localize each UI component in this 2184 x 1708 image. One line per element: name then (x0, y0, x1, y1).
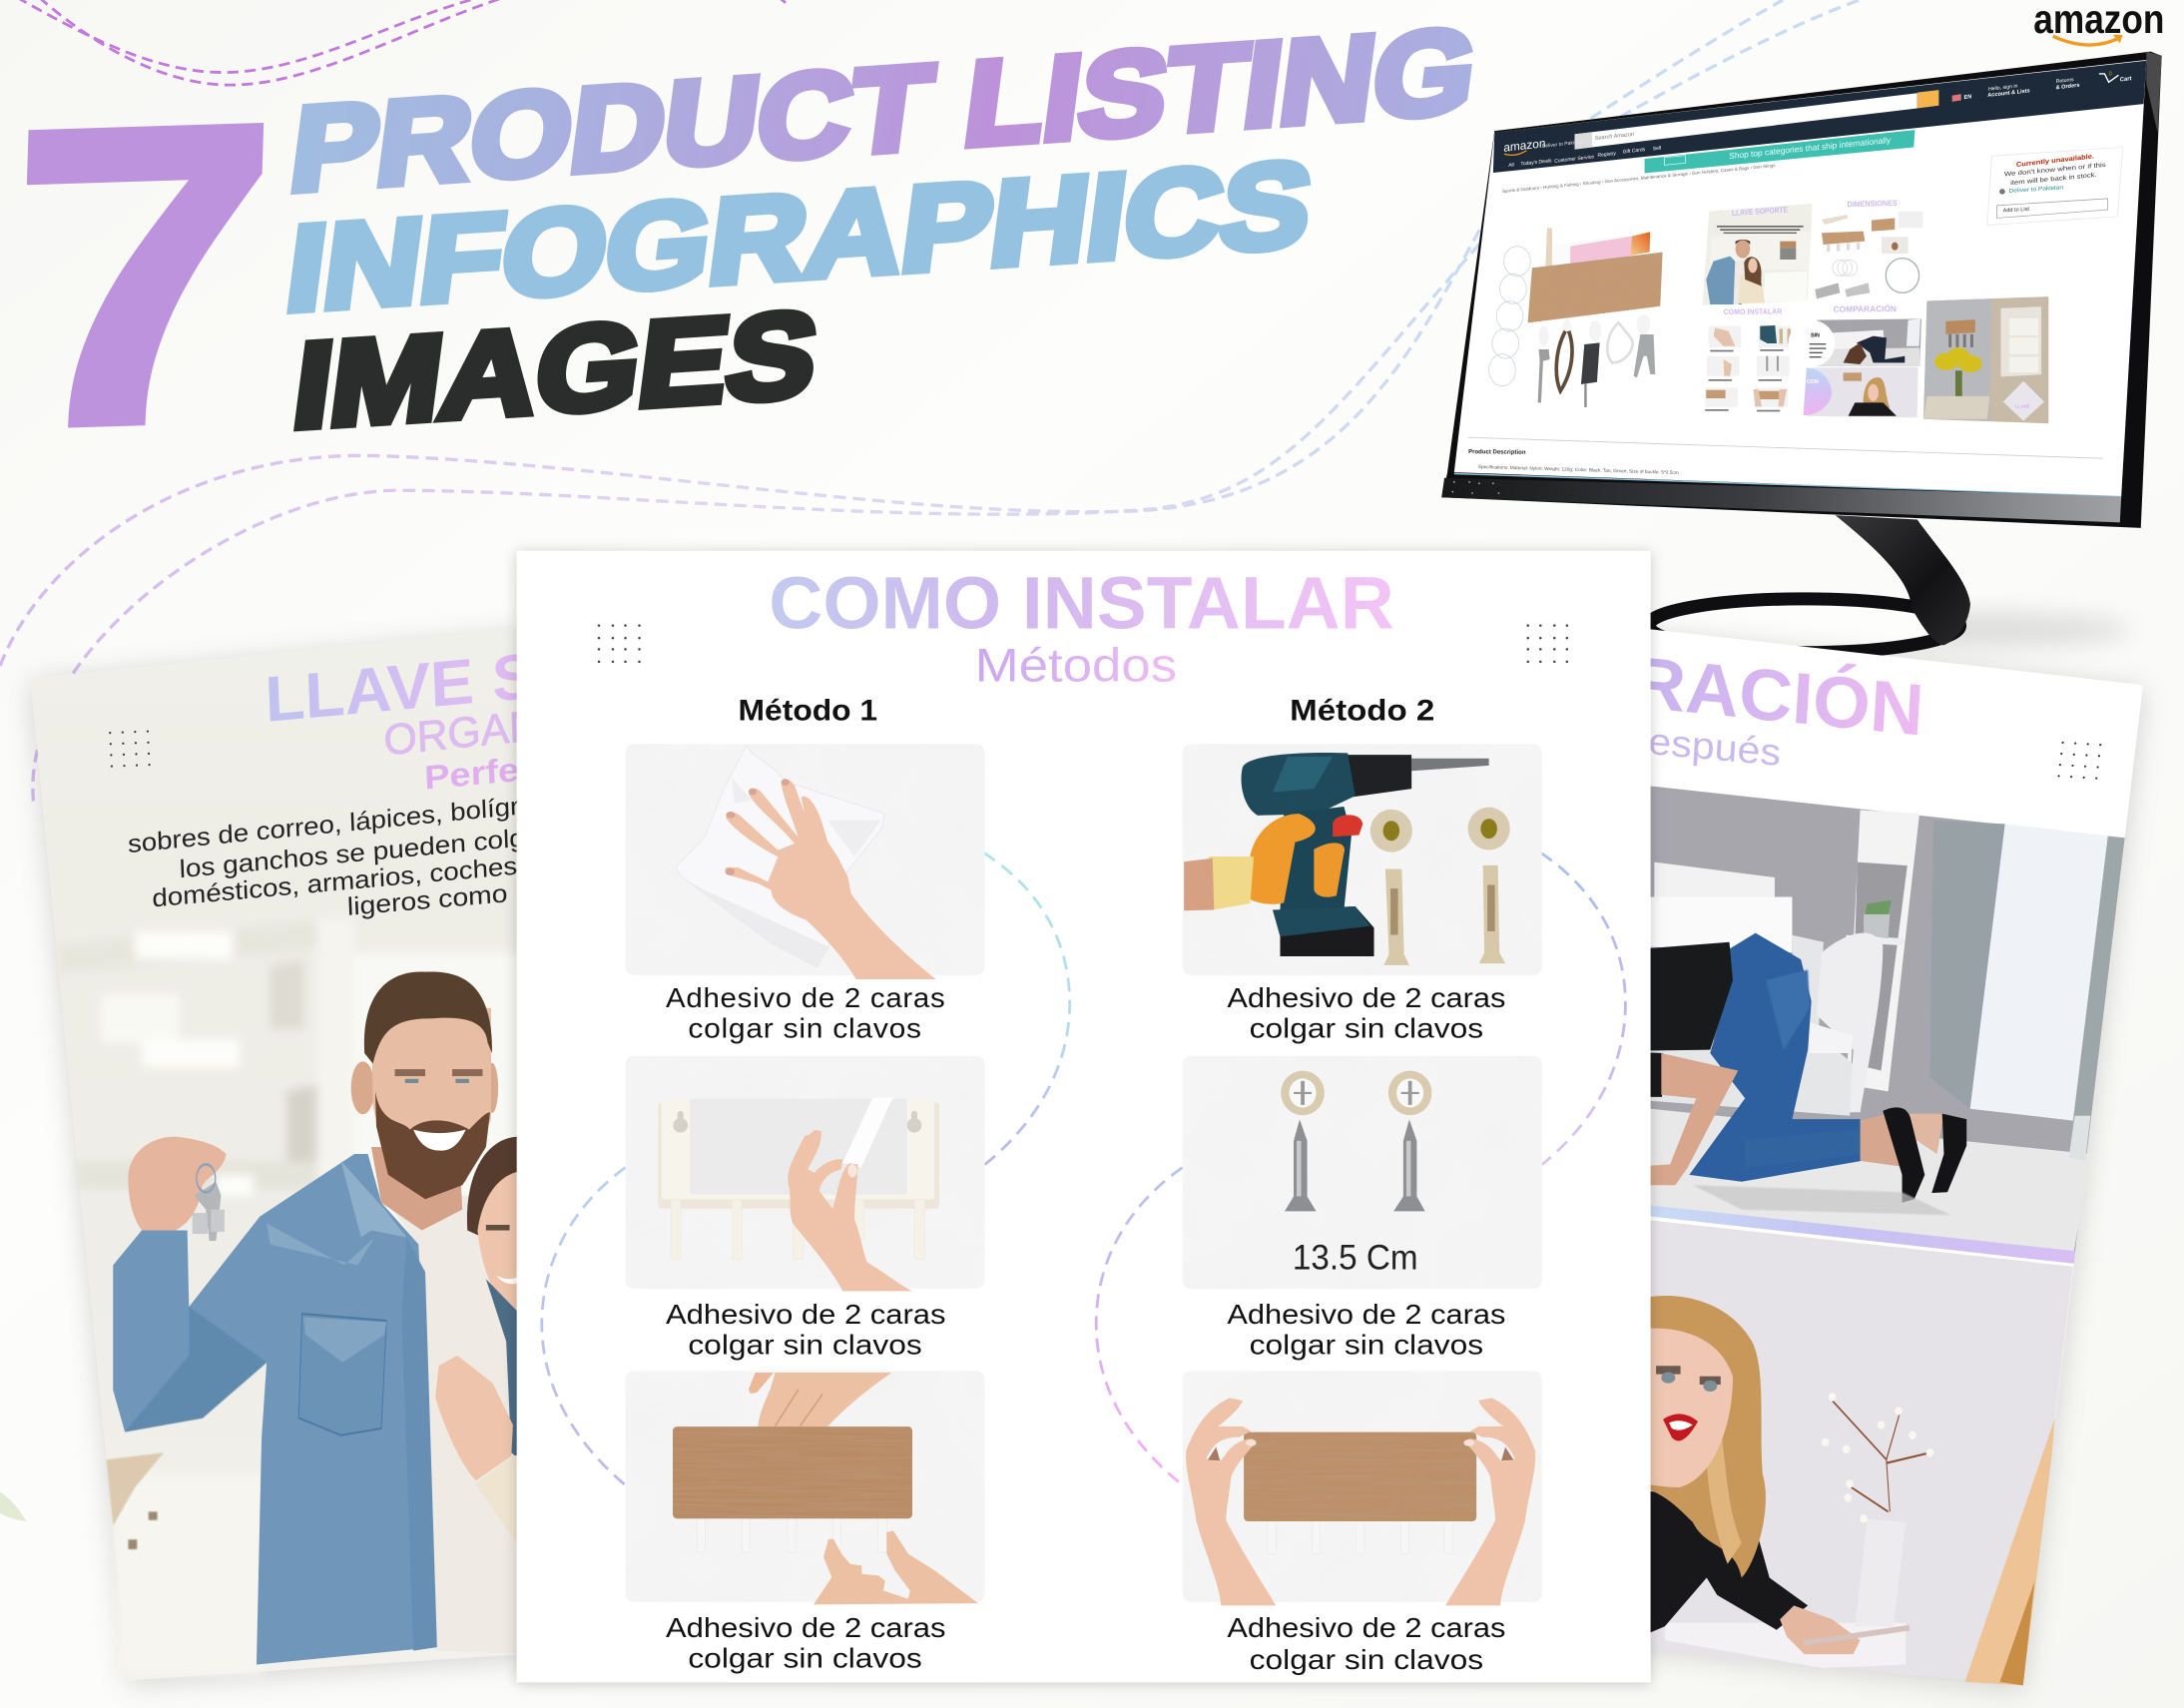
floor (1616, 1105, 2090, 1253)
connector arcs (542, 853, 1625, 1485)
amazon navigation bar: Sell (1653, 146, 1661, 152)
monitor stand (1648, 515, 1970, 653)
sofa seat and armchair (1616, 935, 1854, 1116)
tile caption: colgar sin clavos (1250, 1644, 1483, 1675)
teal banner (1645, 130, 1914, 173)
wall (1616, 783, 2125, 1255)
bright window (1970, 824, 2108, 1121)
title (279, 3, 1483, 453)
availability box: We don't know when or if this (2004, 162, 2106, 179)
dots left (598, 624, 641, 663)
thumbnail: como instalar (1705, 306, 1791, 411)
lips (1663, 1414, 1698, 1440)
dashed curves: top purple (17, 0, 786, 85)
tile caption: colgar sin clavos (688, 1013, 922, 1044)
amazon navigation bar: Customer Service (1554, 154, 1594, 165)
subheading: Métodos (975, 639, 1177, 692)
panel background (517, 551, 1651, 1682)
amazon navigation bar: Registry (1598, 151, 1616, 159)
number 7: 7 (0, 34, 283, 516)
body text: los ganchos se pueden colg (179, 824, 525, 883)
hair (1616, 1296, 1766, 1578)
tile caption (666, 1612, 945, 1674)
monitor screen (1454, 60, 2146, 496)
photo: couple with keys (113, 971, 526, 1665)
amazon navigation bar: Gift Cards (1623, 147, 1646, 156)
body text (128, 793, 525, 921)
thumbnail: comparacion (1789, 302, 1921, 417)
jeans (1689, 933, 1862, 1182)
thumbnail: comparacion: COMPARACIÓN (1834, 302, 1897, 314)
house keys (193, 1182, 225, 1241)
thumbnail: lifestyle door (1923, 296, 2048, 423)
face (1616, 1329, 1733, 1487)
amazon navigation bar: Account & Lists (1987, 88, 2030, 99)
tile caption: Adhesivo de 2 caras (666, 1612, 945, 1643)
panel: como instalar (517, 551, 1651, 1682)
main product image on screen (1489, 228, 1663, 407)
amazon navigation bar: Deliver to Pakistan (1542, 139, 1584, 150)
thumbnail: dimensiones (1815, 199, 1923, 298)
arm (1616, 1053, 1738, 1185)
availability box (1987, 148, 2123, 226)
subtitle: Perfe: Perfe (423, 752, 520, 798)
breadcrumb: Sports & Outdoors › Hunting & Fishing › Shooting › Gun Accessories, Maintenance & Storage › Gun Holsters, Cases & Bags › Gun Slings (1502, 163, 1776, 194)
tile caption: colgar sin clavos (1250, 1013, 1483, 1044)
tile caption: Adhesivo de 2 caras (1227, 982, 1505, 1013)
tile caption: Adhesivo de 2 caras (666, 982, 945, 1013)
thumbnail: llave soporte (1703, 204, 1813, 305)
tile caption: colgar sin clavos (688, 1643, 922, 1674)
grey wall panel (1930, 821, 2005, 1109)
shelf (1847, 810, 1919, 1091)
card base (31, 628, 526, 1680)
amazon navigation bar: Today's Deals (1520, 158, 1552, 168)
wooden plank (1964, 1418, 2055, 1685)
title: RACION: RACIÓN (1630, 642, 1926, 752)
lower legs and shoes (1861, 1114, 1911, 1168)
amazon navigation bar: & Orders (2056, 83, 2079, 91)
woman's denim (486, 1279, 520, 1459)
t-shirt (381, 1196, 526, 1654)
woman's hand (435, 1356, 513, 1480)
room background (57, 917, 523, 1675)
vase (1855, 1518, 1906, 1626)
availability box: Add to List (2003, 207, 2029, 215)
branches (1833, 1401, 1930, 1511)
tile: peeling adhesive (626, 1056, 985, 1291)
tile caption: colgar sin clavos (688, 1330, 922, 1361)
thumbnail: lifestyle door: LLAVE (2014, 404, 2030, 409)
decorative dots (109, 730, 151, 768)
denim jacket (113, 1154, 435, 1665)
amazon navigation bar (1493, 61, 2146, 173)
far right wall (2075, 838, 2125, 1116)
title line: PRODUCT LISTING: PRODUCT LISTING (283, 3, 1483, 217)
amazon navigation bar: EN (1964, 94, 1971, 101)
white sofa (1665, 1623, 1906, 1668)
method 2 heading: Método 2 (1290, 695, 1434, 728)
method 1 heading: Método 1 (739, 695, 877, 728)
monitor (1441, 52, 2162, 653)
card: llave soporte (left) (31, 628, 541, 1680)
thumbnail: comparacion: CON (1807, 379, 1819, 385)
tile caption: Adhesivo de 2 caras (666, 1299, 945, 1330)
title: LLAVE S: LLAVE S (264, 640, 537, 736)
dashed curves: lavender to blue (0, 0, 1860, 801)
tile caption: Adhesivo de 2 caras (1227, 1299, 1505, 1330)
thumbnail: llave soporte: LLAVE SOPORTE (1732, 206, 1789, 218)
wall (1616, 1217, 2073, 1685)
availability box: Deliver to Pakistan (2009, 185, 2063, 195)
tile: screws (1183, 1056, 1542, 1289)
thumbnail: dimensiones: DIMENSIONES (1848, 199, 1898, 209)
availability box: item will be back in stock. (2010, 172, 2097, 187)
subtitle: ORGAN: ORGAN (383, 702, 541, 765)
tile caption (666, 982, 945, 1044)
raised hand (128, 1137, 227, 1231)
card: comparacion (right) (1616, 627, 2143, 1685)
title line: IMAGES: IMAGES (286, 286, 824, 453)
size label: 13.5 Cm (1293, 1238, 1418, 1277)
amazon navigation bar: Returns (2056, 77, 2074, 85)
black top (1616, 1484, 1808, 1647)
dots right (1527, 624, 1568, 663)
title line: INFOGRAPHICS: INFOGRAPHICS (279, 136, 1320, 336)
tile caption (1227, 982, 1505, 1044)
photo: woman with phone (after) (1616, 1217, 2073, 1685)
thumbnail: comparacion: SIN (1811, 332, 1820, 338)
hand and phone (1780, 1605, 1861, 1654)
photo: woman under sofa (before) (1616, 783, 2125, 1255)
amazon navigation bar: Cart (2120, 76, 2132, 83)
product description: Specifications: Material: Nylon; Weight: 120g; Color: Black, Tan, Green; Size of buckle: 5*3.5cm (1478, 464, 1679, 475)
man's head (351, 1061, 374, 1114)
cream sleeve (476, 1452, 526, 1553)
body text: domésticos, armarios, coches (152, 853, 518, 913)
tile: drill and anchors (1183, 744, 1542, 975)
teal banner: Shop top categories that ship internationally (1729, 135, 1892, 161)
black top (1616, 942, 1733, 1051)
product description (1468, 437, 2103, 475)
amazon navigation bar: Hello, sign in (1988, 83, 2018, 93)
tile caption: colgar sin clavos (1250, 1330, 1483, 1361)
man's neck (371, 1147, 462, 1231)
sofa back (1654, 862, 1775, 896)
amazon navigation bar: amazon (1503, 136, 1545, 155)
product description: Product Description (1468, 449, 1526, 456)
body text: sobres de correo, lápices, bolígr (128, 793, 520, 858)
monitor frame (1441, 52, 2162, 528)
tile: wiping cloth (626, 744, 985, 979)
tile: wood holder held up (1183, 1371, 1542, 1605)
tile: wood holder with two hands (626, 1371, 985, 1604)
thumbnail: como instalar: COMO INSTALAR (1724, 306, 1783, 316)
card base (1630, 627, 2143, 1685)
tile caption (1227, 1612, 1505, 1675)
availability box: Currently unavailable. (2016, 153, 2094, 169)
gradient divider (1649, 1205, 2075, 1264)
heading: COMO INSTALAR (769, 561, 1394, 644)
amazon navigation bar: Search Amazon (1595, 132, 1634, 142)
pale leaf (0, 1492, 27, 1521)
kitchen counter (107, 1452, 164, 1549)
woman's face (477, 1171, 520, 1314)
amazon navigation bar: All (1508, 162, 1514, 169)
tile caption: Adhesivo de 2 caras (1227, 1612, 1505, 1643)
decorative dots (2057, 742, 2102, 780)
subtitle: espues: espués (1647, 721, 1782, 775)
monitor shadow (1825, 613, 2131, 647)
body text: ligeros como (346, 879, 508, 921)
tile caption (666, 1299, 945, 1361)
amazon navigation bar: 0 (2109, 71, 2112, 77)
tile caption (1227, 1299, 1505, 1361)
woman's hair (467, 1137, 520, 1258)
